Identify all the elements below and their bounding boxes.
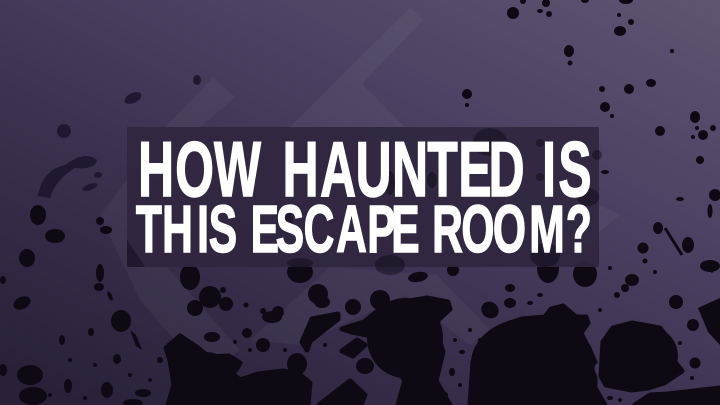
right droplets: [507, 7, 519, 19]
splatter seen through panel: [127, 128, 602, 275]
large blob: centre: [342, 298, 450, 405]
mid fragment: [342, 340, 365, 356]
title line 1: HOW HAUNTED IS: [138, 126, 592, 213]
large blob: bottom right: [635, 388, 720, 405]
title line 2: THIS ESCAPE ROOM?: [136, 191, 592, 266]
faint chevron shapes: [100, 8, 620, 375]
blob bodies: [471, 317, 595, 405]
faded left splatter: [38, 75, 201, 198]
large blob: centre left: [166, 336, 310, 405]
lower fragment: [319, 381, 365, 405]
title: [136, 126, 592, 266]
mid fragment: [302, 314, 338, 350]
small speckles: [468, 328, 472, 332]
large blob: centre right: [470, 306, 605, 405]
medium droplets: [345, 299, 361, 315]
large blob: right: [601, 323, 682, 390]
large blobs, rounded: [166, 298, 720, 405]
left droplets: [30, 205, 46, 225]
title panel: [127, 127, 599, 267]
